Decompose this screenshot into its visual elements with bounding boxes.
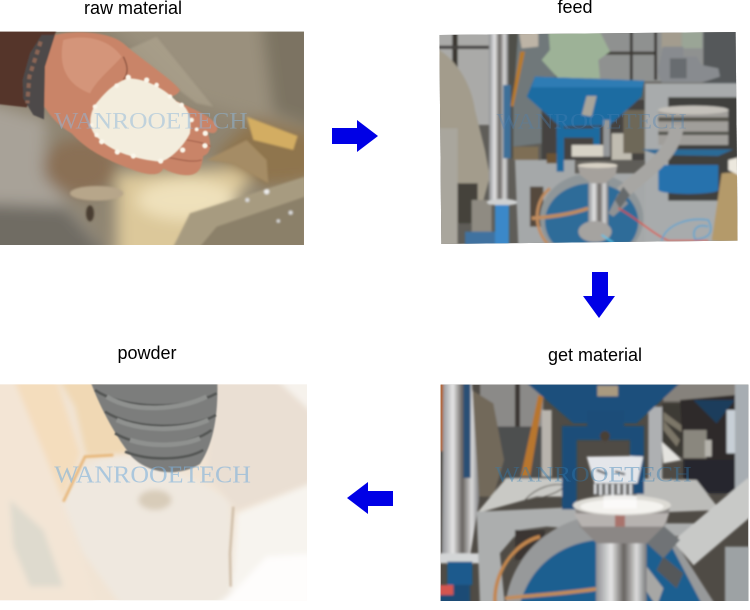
left steel column bbox=[437, 380, 448, 451]
hopper stand bbox=[562, 411, 644, 509]
right frame bbox=[735, 380, 750, 495]
hose bbox=[683, 490, 750, 553]
steel funnel bbox=[596, 542, 647, 607]
background bbox=[480, 380, 543, 427]
hopper bbox=[527, 384, 680, 424]
falling material bbox=[595, 484, 631, 496]
steel pipe bbox=[489, 28, 508, 202]
watermark: WANROOETECH bbox=[54, 463, 251, 489]
photo: feed hopper machine bbox=[439, 32, 738, 244]
arm bbox=[0, 30, 57, 107]
right frame bbox=[645, 83, 742, 247]
watermark: WANROOETECH bbox=[497, 108, 687, 133]
sieve bbox=[680, 395, 735, 470]
material tray bbox=[587, 456, 643, 485]
pile of white pellets bbox=[90, 75, 208, 164]
bags at left bbox=[433, 47, 490, 210]
arrow: right bbox=[332, 120, 378, 152]
back clutter bbox=[542, 100, 648, 160]
machine table bbox=[477, 478, 573, 513]
grey hose bbox=[90, 380, 217, 472]
photo: powder in bag bbox=[0, 384, 307, 600]
grinder disc bbox=[538, 174, 644, 243]
machine body bbox=[515, 160, 648, 247]
feed chute funnel bbox=[588, 182, 608, 225]
hopper bbox=[527, 77, 644, 127]
arrow: left bbox=[347, 482, 393, 514]
watermark: WANROOETECH bbox=[495, 462, 692, 487]
worker and bag bbox=[512, 34, 556, 148]
title: get material: get material bbox=[548, 345, 642, 365]
photo: material falling into funnel bbox=[437, 380, 750, 607]
window backdrop bbox=[440, 34, 490, 126]
palm and fingers bbox=[38, 32, 217, 175]
title: powder: powder bbox=[117, 343, 177, 363]
photo: hand holding raw material pellets bbox=[0, 32, 304, 245]
bag right bbox=[710, 171, 738, 241]
hopper stand bbox=[557, 127, 564, 172]
watermark: WANROOETECH bbox=[54, 108, 248, 134]
grinder disc bbox=[504, 520, 714, 601]
flexible hose bbox=[622, 125, 677, 193]
wires bbox=[618, 208, 708, 241]
rotary valve bbox=[662, 32, 682, 48]
sieve bbox=[658, 110, 728, 145]
arrow: down bbox=[583, 272, 615, 318]
watch bbox=[23, 35, 55, 119]
